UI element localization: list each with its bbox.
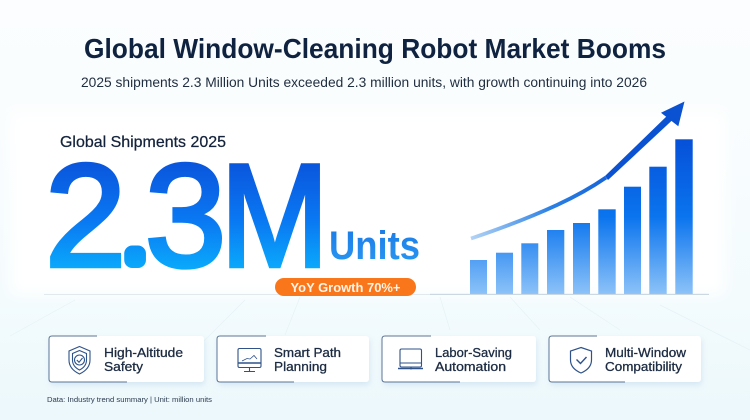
card label: Labor-Saving xyxy=(435,345,512,360)
card label: Automation xyxy=(435,359,506,374)
kpi label: Global Shipments 2025 xyxy=(60,134,226,151)
card label: Compatibility xyxy=(605,359,683,374)
kpi value: 3 xyxy=(145,134,226,297)
source note: Data: Industry trend summary | Unit: million units xyxy=(47,395,212,404)
trend arrow xyxy=(471,102,684,238)
kpi value: . xyxy=(127,206,143,273)
hero panel xyxy=(10,112,725,295)
kpi unit: Units xyxy=(329,224,420,268)
card label: Planning xyxy=(274,359,327,374)
card: high-altitude safety xyxy=(49,336,204,382)
card label: Safety xyxy=(104,359,144,374)
card label: Multi-Window xyxy=(605,345,687,360)
kpi value: M xyxy=(221,134,329,297)
floor perspective lines xyxy=(10,297,750,350)
icon: shield check xyxy=(570,348,592,373)
growth badge xyxy=(275,278,416,296)
card: multi-window compatibility xyxy=(549,336,701,382)
subtitle: 2025 shipments 2.3 Million Units exceeded 2.3 million units, with growth continuing into 2026 xyxy=(81,75,647,90)
kpi value xyxy=(45,134,329,297)
floor line xyxy=(44,294,430,296)
chart baseline xyxy=(430,293,709,295)
kpi value: 2 xyxy=(45,134,126,297)
card: smart path planning xyxy=(217,336,369,382)
bar chart xyxy=(470,139,693,294)
icon: computer xyxy=(398,349,423,370)
title: Global Window-Cleaning Robot Market Booms xyxy=(84,33,666,64)
card: labor-saving automation xyxy=(382,336,536,382)
icon: shield check xyxy=(69,346,90,374)
growth badge: YoY Growth 70%+ xyxy=(290,280,401,295)
icon: monitor with path xyxy=(238,348,261,372)
card label: High-Altitude xyxy=(104,345,183,360)
card label: Smart Path xyxy=(274,345,341,360)
